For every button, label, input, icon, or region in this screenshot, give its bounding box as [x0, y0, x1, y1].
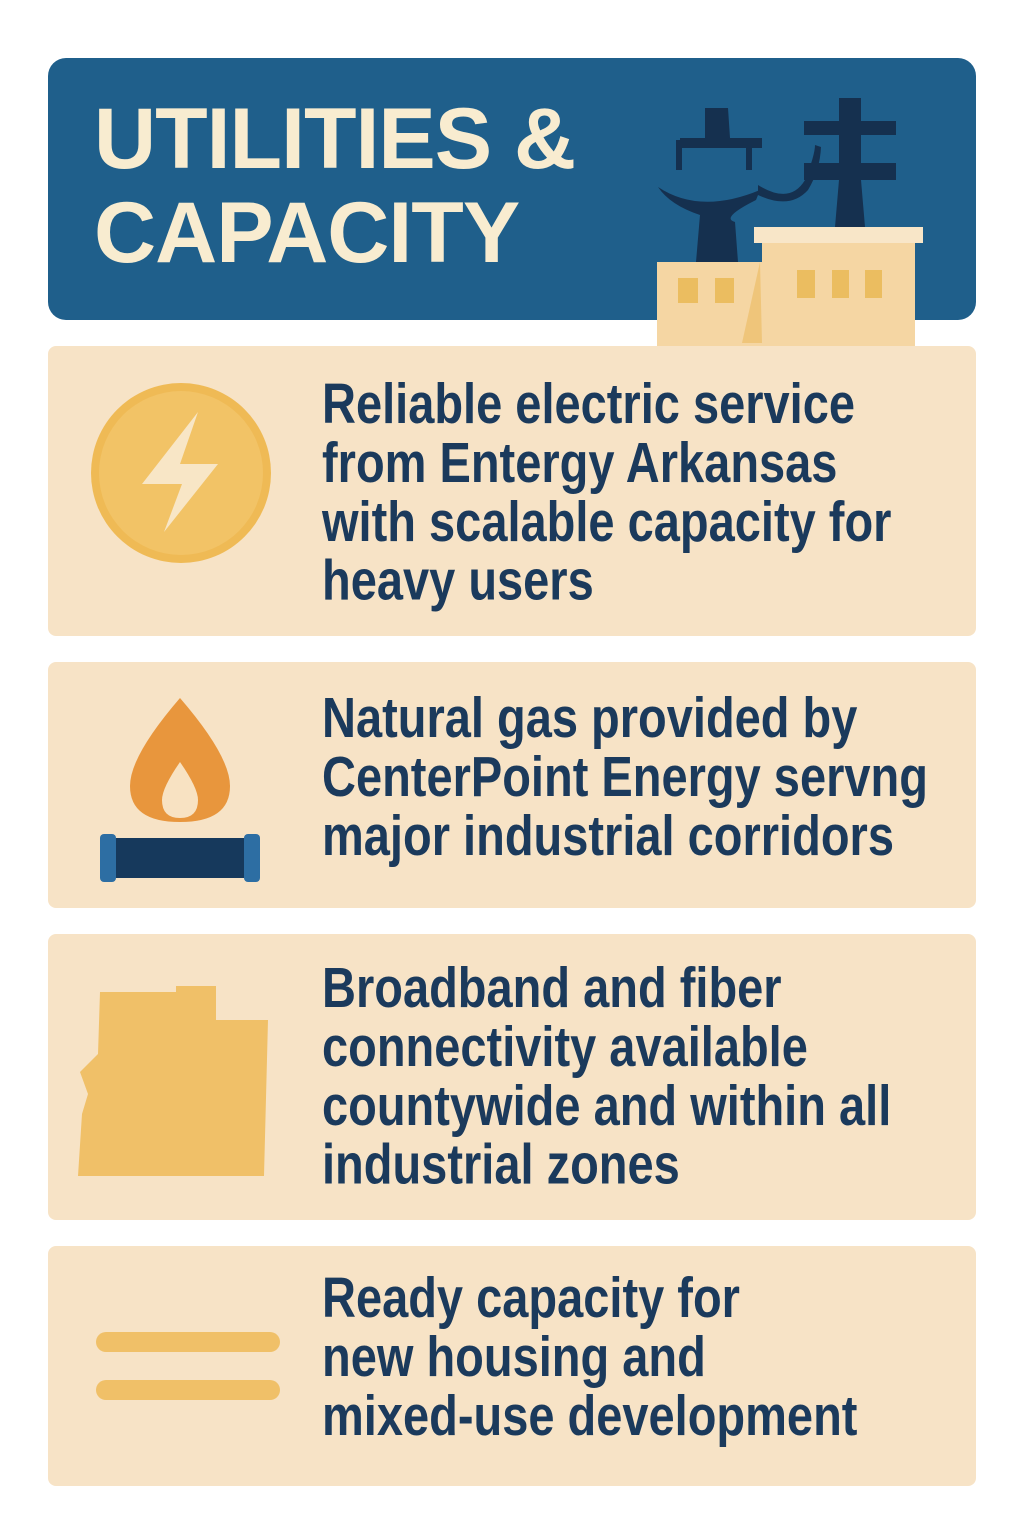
icon: bars: [96, 1332, 280, 1400]
text: gas: major industrial corridors: [322, 803, 894, 867]
panel: housing: [48, 1246, 976, 1486]
illustration: power towers and buildings: [657, 98, 923, 346]
panel: electric: [48, 346, 976, 636]
text: electric: [322, 372, 891, 612]
title: [94, 91, 575, 281]
text: housing: mixed-use development: [322, 1383, 857, 1447]
text: electric: heavy users: [322, 548, 594, 612]
text: broadband: countywide and within all: [322, 1073, 891, 1137]
text: broadband: [322, 956, 891, 1196]
text: electric: from Entergy Arkansas: [322, 430, 837, 494]
icon: lightning: [91, 383, 271, 563]
text: gas: Natural gas provided by: [322, 686, 857, 749]
text: broadband: Broadband and fiber: [322, 956, 782, 1019]
title: UTILITIES &: [94, 91, 575, 187]
text: housing: new housing and: [322, 1324, 706, 1388]
icon: flame and pipe: [100, 698, 260, 882]
title: CAPACITY: [94, 185, 519, 281]
icon: county map: [78, 986, 268, 1176]
text: gas: CenterPoint Energy servng: [322, 744, 928, 808]
text: broadband: connectivity available: [322, 1014, 808, 1078]
text: housing: Ready capacity for: [322, 1266, 740, 1329]
panel: gas: [48, 662, 976, 908]
header banner: [48, 58, 976, 320]
text: electric: with scalable capacity for: [322, 489, 891, 553]
text: electric: Reliable electric service: [322, 372, 855, 435]
text: broadband: industrial zones: [322, 1132, 680, 1196]
text: housing: [322, 1266, 857, 1447]
text: gas: [322, 686, 928, 867]
panel: broadband: [48, 934, 976, 1220]
